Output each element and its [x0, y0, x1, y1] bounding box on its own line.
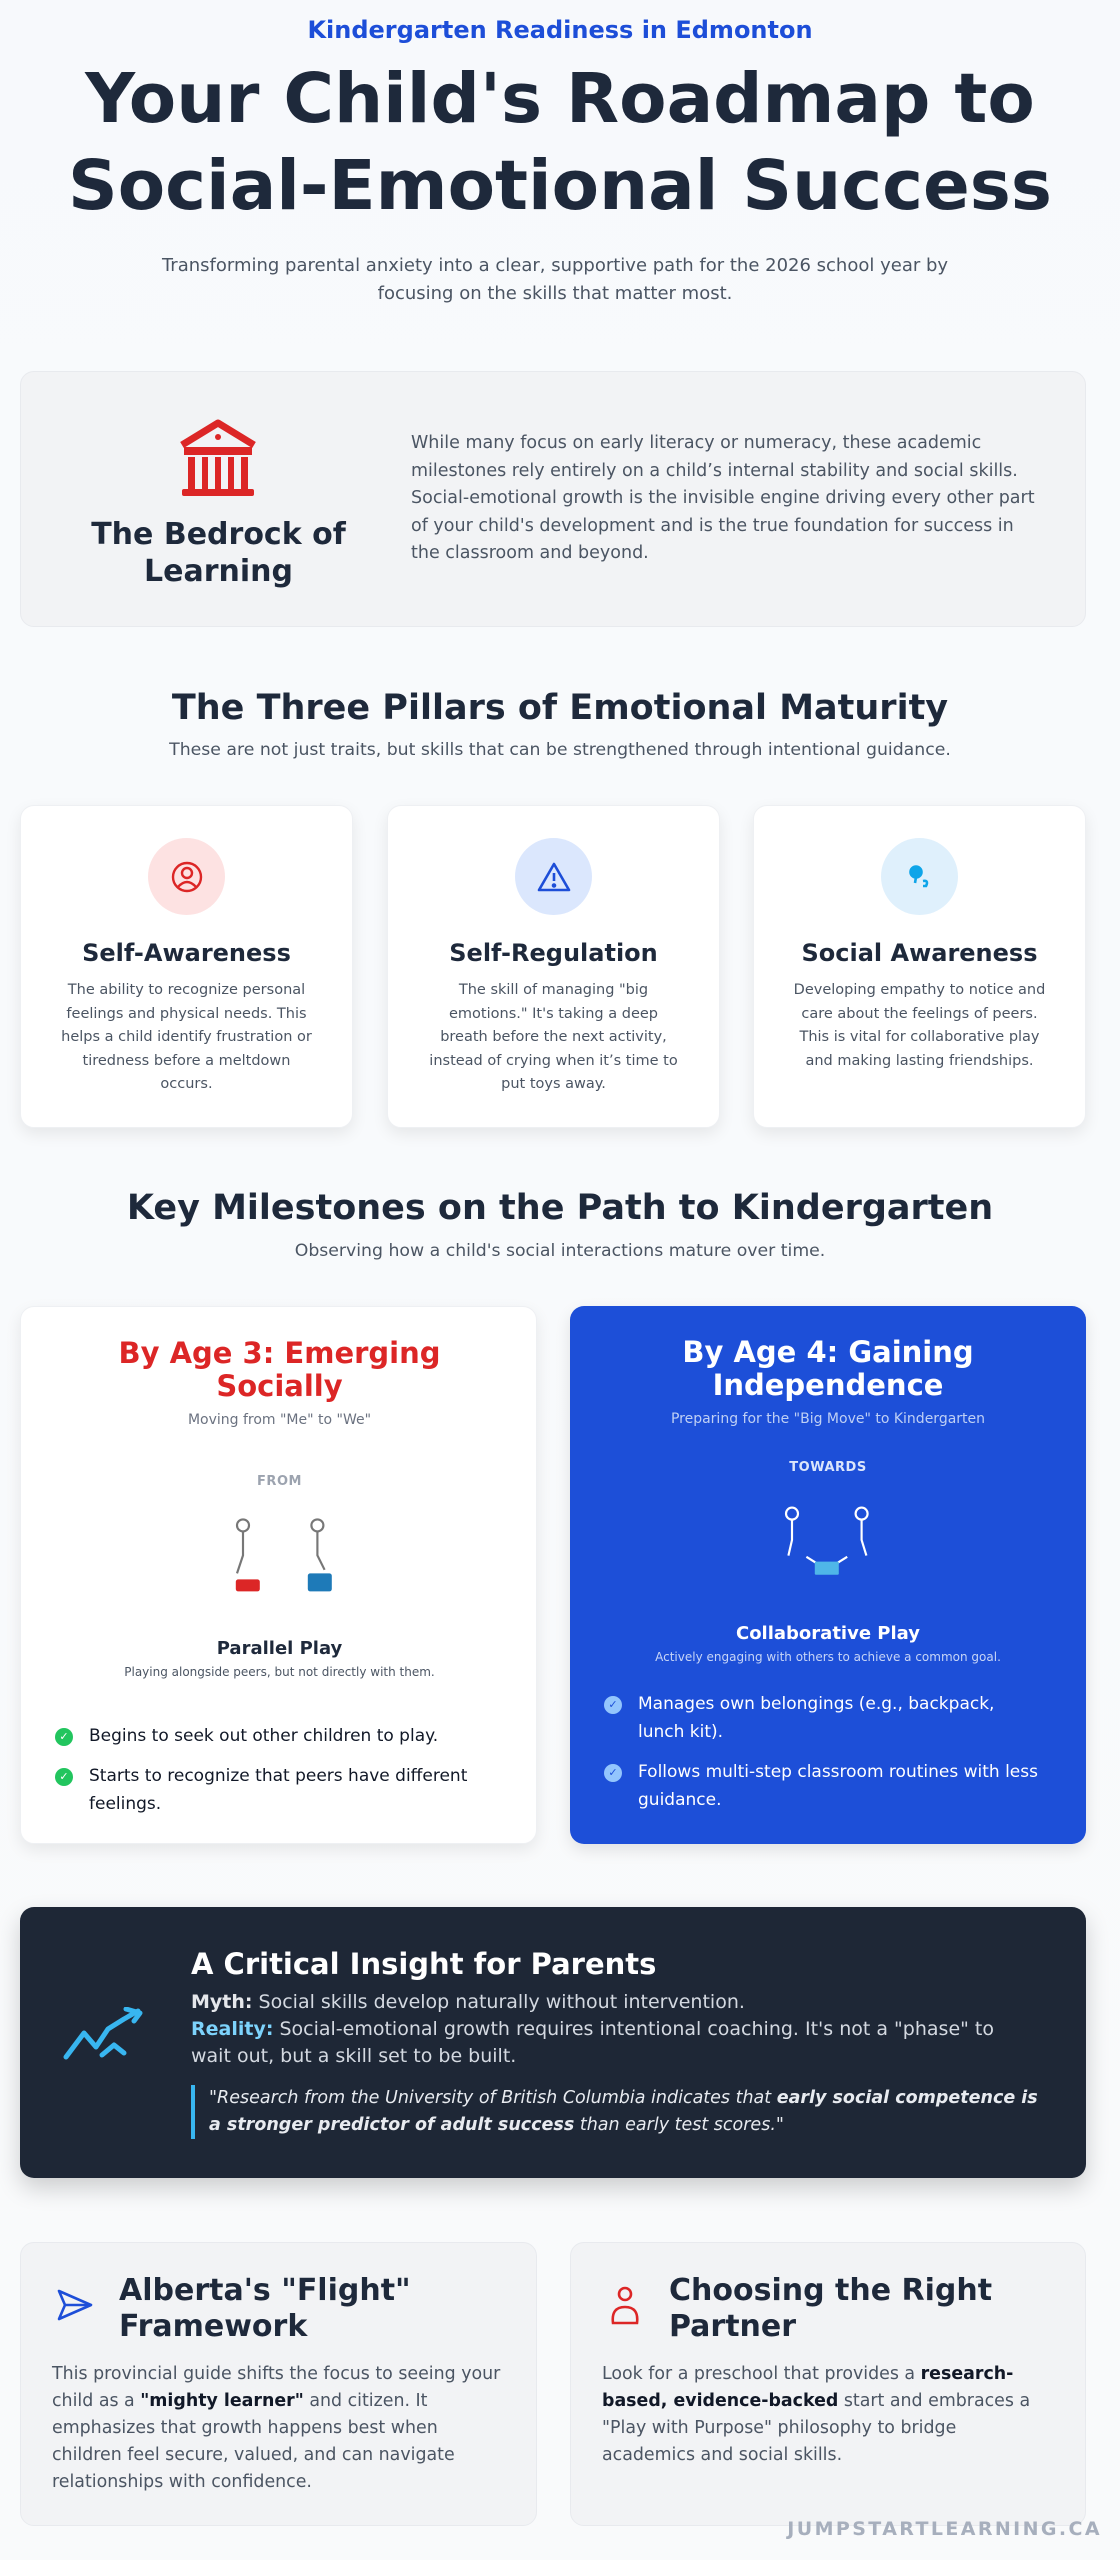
title	[68, 59, 1052, 226]
myth reality text	[191, 1991, 994, 2067]
heading: Alberta's "Flight" Framework	[119, 2273, 411, 2344]
panel: self-regulation	[387, 805, 720, 1128]
panel: bedrock	[20, 371, 1086, 627]
subtitle: Transforming parental anxiety into a clear, supportive path for the 2026 school year by focusing on the skills that matter most.	[162, 255, 948, 304]
heading: Choosing the Right Partner	[669, 2273, 992, 2344]
icon: person	[611, 2286, 639, 2324]
heading: milestones: Key Milestones on the Path to Kindergarten	[127, 1188, 993, 1228]
subheading: pillars: These are not just traits, but skills that can be strengthened through intentional guidance.	[169, 740, 951, 760]
text: The ability to recognize personal feelings and physical needs. This helps a child identify frustration or tiredness before a meltdown occurs.	[61, 982, 312, 1092]
heading: three pillars: The Three Pillars of Emotional Maturity	[172, 688, 948, 728]
icon: collaborative play	[784, 1506, 869, 1575]
icon: trend chart	[64, 2007, 142, 2060]
kicker: Kindergarten Readiness in Edmonton	[307, 16, 813, 44]
text: Developing empathy to notice and care about the feelings of peers. This is vital for collaborative play and making lasting friendships.	[794, 982, 1045, 1068]
checklist: ✓	[59, 1730, 69, 1743]
quote: "Research from the University of British Columbia indicates that early social competence is a stronger predictor of adult success than early test scores."	[209, 2088, 1038, 2135]
label: from: FROM	[257, 1474, 302, 1489]
title: By Age 3: Emerging Socially	[118, 1336, 441, 1403]
panel: age 4	[570, 1306, 1086, 1844]
caption: Actively engaging with others to achieve a common goal.	[655, 1650, 1001, 1664]
label: parallel play: Parallel Play	[217, 1638, 342, 1659]
checklist: ✓	[59, 1770, 69, 1783]
text: The skill of managing "big emotions." It's taking a deep breath before the next activity, instead of crying when it’s time to put toys away.	[429, 982, 678, 1092]
title: A Critical Insight for Parents	[191, 1947, 656, 1981]
title: By Age 4: Gaining Independence	[682, 1335, 974, 1402]
label: collaborative play: Collaborative Play	[736, 1623, 920, 1644]
checklist: ✓	[608, 1698, 618, 1711]
subheading: milestones: Observing how a child's social interactions mature over time.	[295, 1241, 825, 1261]
title: Self-Regulation	[449, 939, 658, 967]
checklist: ✓	[608, 1766, 618, 1779]
title: Social Awareness	[802, 939, 1038, 967]
panel: critical insight	[20, 1907, 1086, 2178]
icon: speech	[881, 838, 958, 915]
caption: Playing alongside peers, but not directly with them.	[124, 1665, 435, 1679]
panel: right partner	[570, 2242, 1086, 2526]
title: Self-Awareness	[82, 939, 291, 967]
checklist: Starts to recognize that peers have different feelings.	[89, 1766, 467, 1814]
icon: warning	[515, 838, 592, 915]
panel: self-awareness	[20, 805, 353, 1128]
icon: paper plane	[58, 2290, 92, 2320]
panel: social awareness	[753, 805, 1086, 1128]
checklist: Follows multi-step classroom routines with less guidance.	[638, 1762, 1038, 1810]
checklist	[55, 1726, 467, 1814]
icon: school building	[180, 420, 256, 496]
myth reality text: Myth: Social skills develop naturally without intervention.	[191, 1991, 745, 2013]
heading: bedrock: The Bedrock of Learning	[91, 517, 346, 589]
myth reality text: Reality: Social-emotional growth requires intentional coaching. It's not a "phase" to wait out, but a skill set to be built.	[191, 2018, 994, 2067]
panel: age 3	[20, 1306, 537, 1844]
subtitle: Moving from "Me" to "We"	[188, 1412, 371, 1428]
text: This provincial guide shifts the focus to seeing your child as a "mighty learner" and citizen. It emphasizes that growth happens best when children feel secure, valued, and can navigate relationships with confidence.	[52, 2364, 500, 2492]
checklist: Manages own belongings (e.g., backpack, lunch kit).	[638, 1694, 994, 1742]
subtitle: Preparing for the "Big Move" to Kindergarten	[671, 1411, 985, 1427]
text: bedrock: While many focus on early literacy or numeracy, these academic milestones rely entirely on a child’s internal stability and social skills. Social-emotional growth is the invisible engine driving every other part of your child's development and is the true foundation for success in the classroom and beyond.	[411, 433, 1035, 563]
checklist	[604, 1694, 1038, 1810]
panel: flight framework	[20, 2242, 537, 2526]
checklist: Begins to seek out other children to play.	[89, 1726, 438, 1746]
icon: person	[148, 838, 225, 915]
footer: site url: JUMPSTARTLEARNING.CA	[787, 2518, 1102, 2540]
icon: parallel play	[236, 1518, 332, 1592]
title: Your Child's Roadmap to	[85, 59, 1035, 139]
text: Look for a preschool that provides a research-based, evidence-backed start and embraces a "Play with Purpose" philosophy to bridge academics and social skills.	[602, 2364, 1030, 2465]
title: Social-Emotional Success	[68, 146, 1052, 226]
label: towards: TOWARDS	[789, 1460, 867, 1475]
